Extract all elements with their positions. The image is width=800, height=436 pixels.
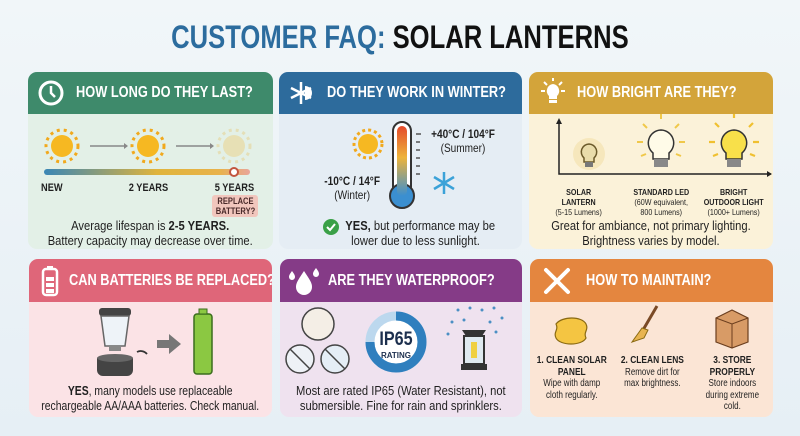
panel: winter [279, 72, 522, 249]
heading: batteries [29, 259, 272, 302]
text: lifespan [48, 218, 253, 248]
text: waterproof answer: submersible. Fine for rain and sprinklers. [300, 398, 502, 413]
text: lifespan: Average lifespan is 2-5 YEARS. [71, 218, 230, 233]
panel: winter: (Summer) [441, 141, 485, 155]
illustration: lantern and battery [97, 308, 213, 376]
panel: brightness [529, 72, 773, 249]
heading: winter [279, 72, 522, 114]
heading: waterproof [280, 259, 522, 302]
panel: brightness: BRIGHT [720, 187, 748, 197]
panel: maintain: max brightness. [624, 378, 680, 389]
heading: how long: HOW LONG DO THEY LAST? [76, 84, 253, 101]
text: brightness note: Great for ambiance, not primary lighting. [551, 218, 751, 233]
panel: maintain: cloth regularly. [546, 390, 598, 400]
panel: how long: NEW [41, 182, 63, 194]
panel: how long: 5 YEARS [214, 182, 254, 194]
panel: waterproof [280, 259, 522, 417]
panel: maintain: Wipe with damp [544, 378, 600, 389]
panel: winter: -10°C / 14°F [324, 174, 380, 188]
timeline graphic [44, 128, 252, 177]
heading: maintain [530, 259, 773, 302]
panel: maintain: 3. STORE [713, 354, 751, 366]
heading: brightness: HOW BRIGHT ARE THEY? [577, 84, 737, 101]
illustration: IP65 rating [285, 306, 504, 374]
panel: maintain: Store indoors [708, 378, 756, 389]
heading: batteries: CAN BATTERIES BE REPLACED? [69, 272, 272, 289]
panel: maintain: PANEL [558, 366, 586, 378]
illustration: IP65 rating: RATING [381, 351, 411, 360]
thermometer graphic [352, 121, 455, 209]
heading: maintain: HOW TO MAINTAIN? [586, 272, 711, 289]
icon: check [323, 219, 339, 235]
panel: brightness: SOLAR [567, 187, 591, 197]
text: lifespan: Battery capacity may decrease over time. [48, 233, 253, 248]
panel: winter: +40°C / 104°F [431, 127, 495, 141]
heading: brightness [529, 72, 773, 114]
heading: winter: DO THEY WORK IN WINTER? [327, 84, 506, 101]
panel: maintain: PROPERLY [709, 366, 755, 378]
panel: brightness: (5-15 Lumens) [556, 207, 602, 217]
panel: batteries [29, 259, 272, 417]
panel: brightness: LANTERN [562, 197, 596, 207]
callout: replace battery: BATTERY? [215, 206, 255, 216]
text: winter answer [345, 218, 495, 248]
text: batteries answer [42, 383, 259, 413]
panel: winter: (Winter) [334, 188, 370, 202]
callout: replace battery [212, 195, 258, 217]
panel: maintain: Remove dirt for [625, 366, 679, 378]
panel: maintain: during extreme [705, 390, 759, 400]
panel: maintain [530, 259, 773, 417]
panel: how long [28, 72, 273, 249]
text: brightness note [551, 218, 751, 248]
text: batteries answer: rechargeable AA/AAA batteries. Check manual. [42, 398, 259, 413]
text: waterproof answer: Most are rated IP65 (Water Resistant), not [296, 383, 506, 398]
panel: maintain: 2. CLEAN LENS [620, 354, 683, 366]
panel: brightness: (1000+ Lumens) [708, 207, 760, 217]
icons: maintenance steps [554, 305, 749, 349]
panel: brightness: (60W equivalent, [634, 197, 688, 207]
illustration: IP65 rating: IP65 [379, 328, 413, 349]
text: brightness note: Brightness varies by model. [582, 233, 720, 248]
title: CUSTOMER FAQ: SOLAR LANTERNS [171, 19, 629, 55]
panel: maintain: cold. [724, 401, 740, 412]
chart: brightness bulbs [556, 114, 772, 177]
panel: brightness: 800 Lumens) [640, 207, 682, 217]
callout: replace battery: REPLACE [217, 196, 253, 206]
panel: maintain: 1. CLEAN SOLAR [537, 354, 607, 366]
panel: brightness: OUTDOOR LIGHT [704, 197, 764, 207]
heading: how long [28, 72, 273, 114]
text: winter answer: YES, but performance may be [345, 218, 495, 233]
text: batteries answer: YES, many models use replaceable [68, 383, 233, 398]
panel: how long: 2 YEARS [128, 182, 168, 194]
text: winter answer: lower due to less sunlight. [351, 233, 480, 248]
text: waterproof answer [296, 383, 506, 413]
heading: waterproof: ARE THEY WATERPROOF? [328, 272, 495, 289]
panel: brightness: STANDARD LED [633, 187, 689, 197]
